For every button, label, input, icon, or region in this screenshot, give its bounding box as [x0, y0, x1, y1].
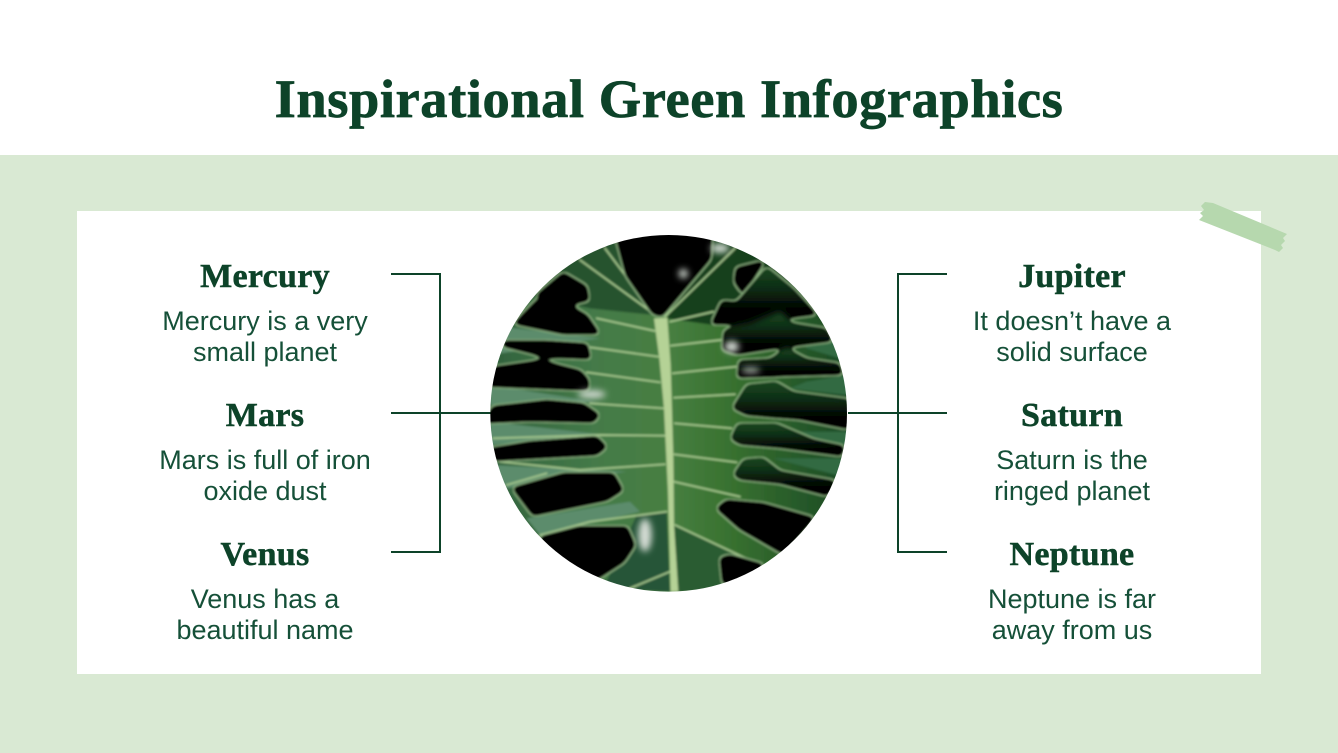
title: Inspirational Green Infographics	[275, 68, 1063, 129]
Venus block: Venus has a	[191, 584, 339, 614]
Neptune block: Neptune	[1010, 536, 1134, 573]
Venus block	[176, 536, 354, 645]
washi tape	[1199, 202, 1287, 252]
Neptune block: Neptune is far	[988, 584, 1156, 614]
Saturn block: ringed planet	[994, 476, 1150, 506]
Neptune block	[988, 536, 1156, 645]
Mars block: Mars	[226, 397, 304, 434]
leaf highlights	[578, 244, 760, 552]
leaf midrib	[654, 318, 678, 592]
white card panel	[77, 211, 1261, 674]
Venus block: Venus	[220, 536, 310, 573]
Venus block: beautiful name	[176, 615, 354, 645]
background band	[0, 155, 1338, 753]
Mercury block: Mercury is a very	[162, 306, 368, 336]
Mars block	[159, 397, 371, 506]
Mars block: oxide dust	[203, 476, 327, 506]
leaf photo in circle	[490, 235, 847, 592]
Mercury block	[162, 258, 368, 367]
Saturn block: Saturn	[1021, 397, 1123, 434]
Saturn block	[994, 397, 1150, 506]
leaf gaps, right lobes	[710, 267, 850, 497]
right connector	[848, 274, 947, 552]
graphics: connectors, leaf photo and tape	[391, 202, 1287, 592]
left connector	[391, 274, 491, 552]
Mercury block: Mercury	[200, 258, 330, 295]
Jupiter block: Jupiter	[1018, 258, 1126, 295]
Mars block: Mars is full of iron	[159, 445, 371, 475]
leaf veins	[493, 248, 760, 588]
leaf gaps, left and top	[483, 225, 813, 587]
Jupiter block	[973, 258, 1171, 367]
Jupiter block: solid surface	[996, 337, 1148, 367]
Neptune block: away from us	[992, 615, 1152, 645]
Jupiter block: It doesn’t have a	[973, 306, 1171, 336]
Saturn block: Saturn is the	[996, 445, 1148, 475]
Mercury block: small planet	[193, 337, 337, 367]
